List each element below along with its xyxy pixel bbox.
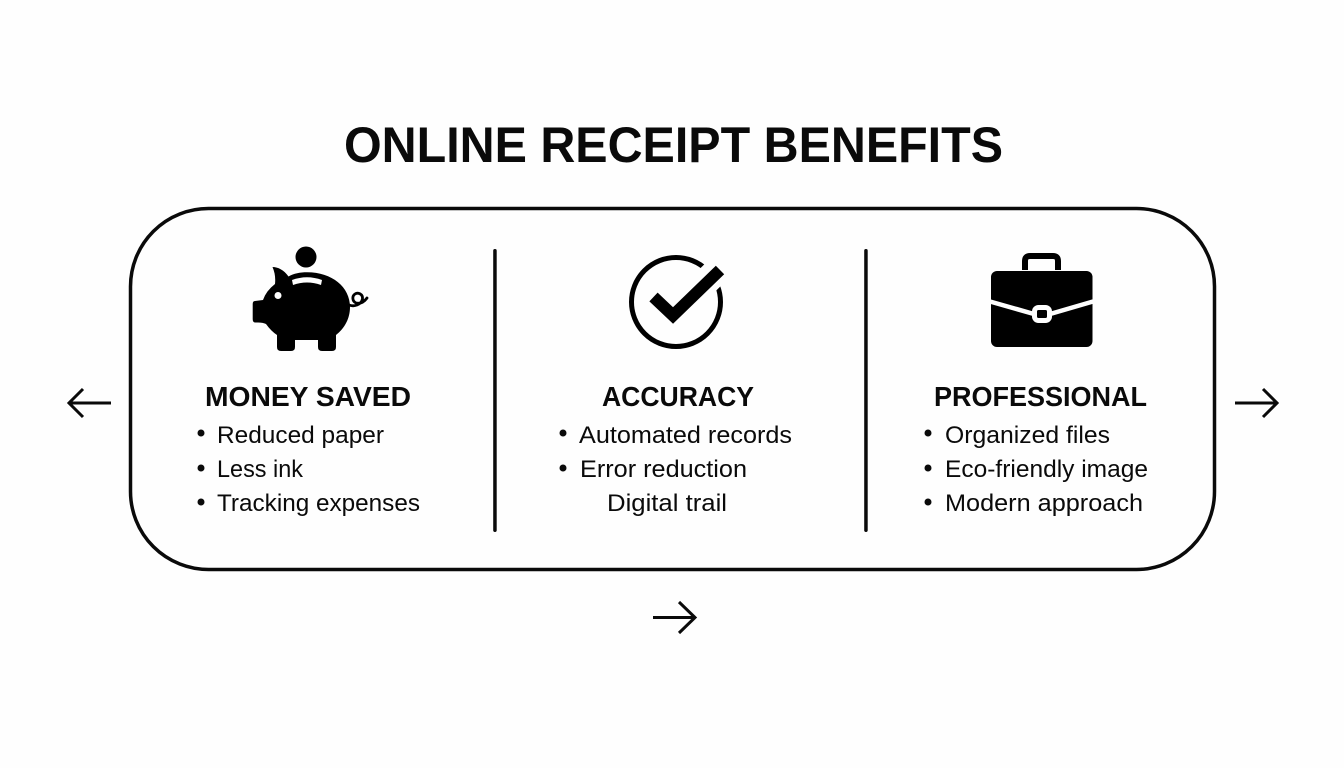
heading: professional: PROFESSIONAL: [934, 381, 1147, 412]
icon: briefcase: [990, 256, 1093, 347]
panel: benefits container: [130, 208, 1214, 570]
icon: check mark in circle: [632, 258, 726, 346]
list: professional: Eco-friendly image: [945, 456, 1148, 483]
list: professional: Organized files: [945, 422, 1110, 449]
list: money saved: [198, 422, 420, 517]
list: money saved: Tracking expenses: [217, 490, 420, 517]
heading: accuracy: ACCURACY: [602, 381, 754, 412]
list: accuracy: Digital trail: [607, 490, 727, 517]
icon: piggy bank: [253, 246, 367, 351]
list: money saved: Reduced paper: [217, 422, 384, 449]
heading: money saved: MONEY SAVED: [205, 381, 411, 412]
list: money saved: Less ink: [217, 456, 304, 483]
arrow: bottom: [653, 602, 695, 633]
arrow: left: [69, 389, 111, 417]
list: professional: [924, 422, 1148, 517]
title: ONLINE RECEIPT BENEFITS: [344, 117, 1003, 173]
arrow: right: [1235, 389, 1277, 417]
list: accuracy: Automated records: [579, 422, 792, 449]
list: professional: Modern approach: [945, 490, 1143, 517]
list: accuracy: [560, 422, 792, 517]
list: accuracy: Error reduction: [580, 456, 747, 483]
